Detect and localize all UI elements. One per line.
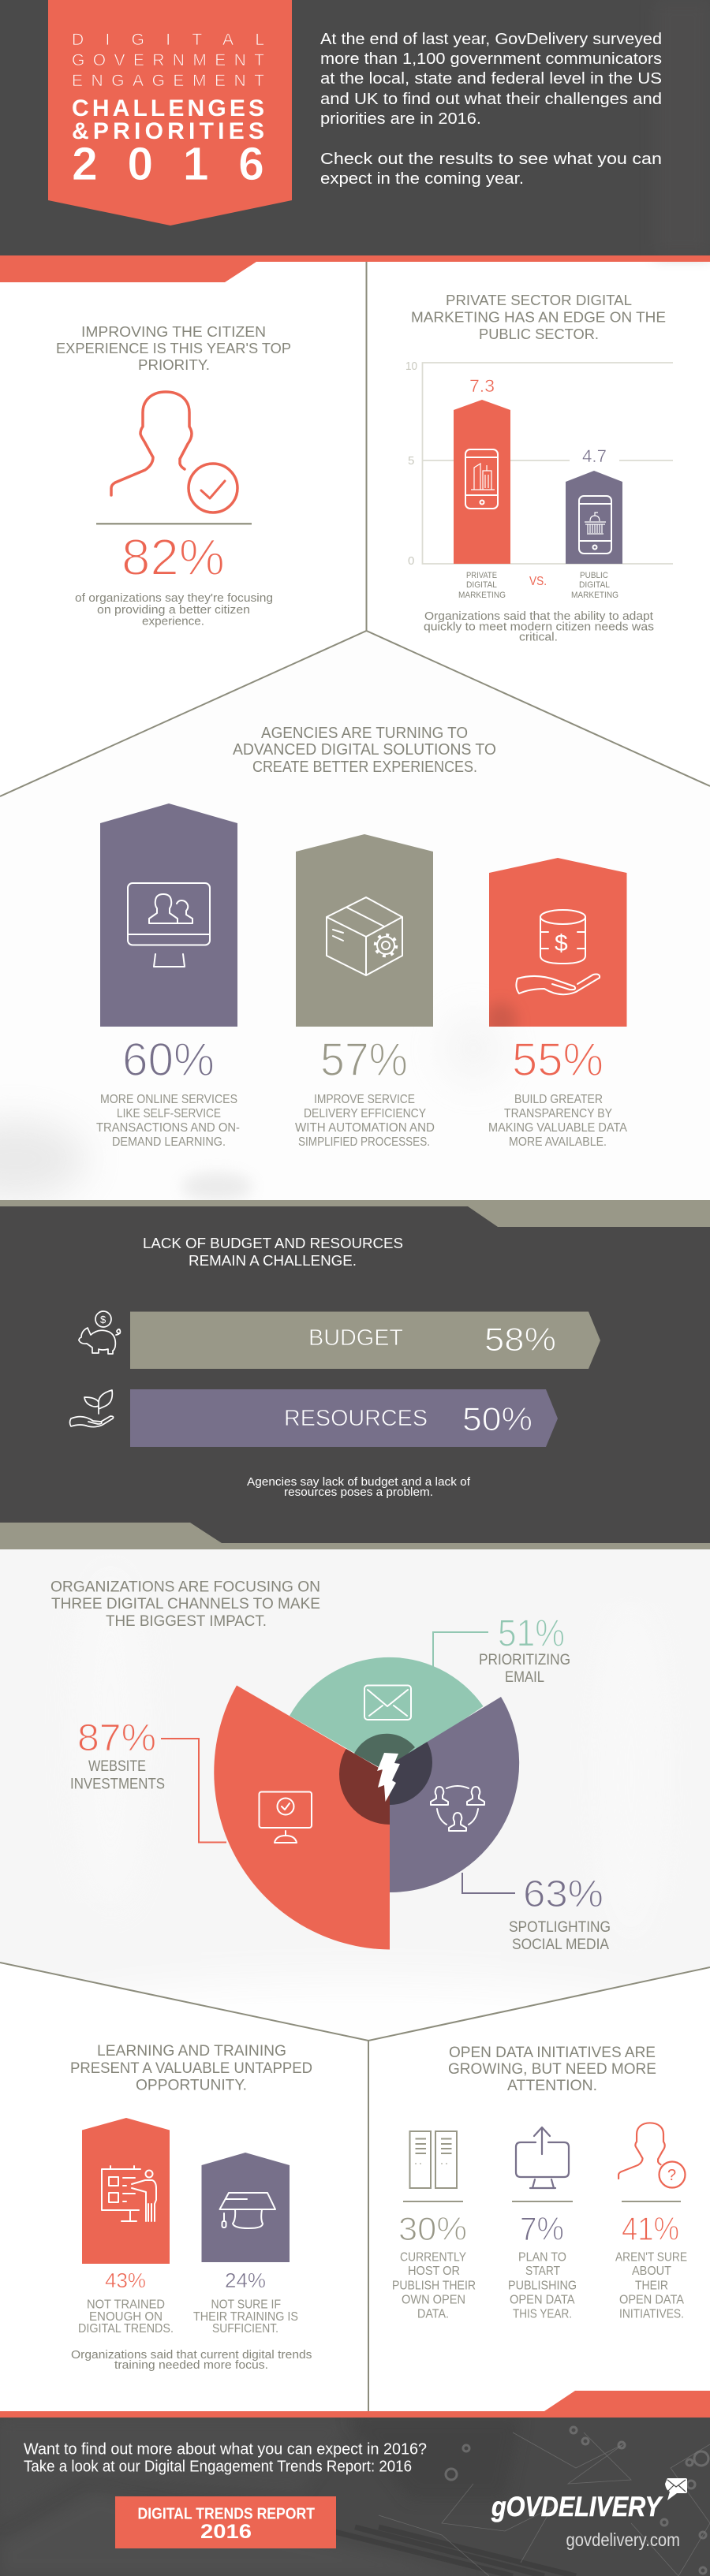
heading: PRESENT A VALUABLE UNTAPPED [70, 2060, 312, 2077]
callout: website 87%: INVESTMENTS [70, 1776, 165, 1793]
caption: on providing a better citizen [97, 603, 250, 617]
bar: private [454, 376, 510, 564]
ribbon title: &PRIORITIES [72, 118, 264, 144]
logo: govdelivery: govdelivery.com [566, 2529, 680, 2550]
intro text [320, 31, 662, 188]
caption: WITH AUTOMATION AND [295, 1121, 435, 1135]
core: website [339, 1749, 390, 1825]
column: service delivery [295, 834, 435, 1149]
caption: MAKING VALUABLE DATA [488, 1121, 627, 1135]
column: plan to publish: PLAN TO [518, 2250, 566, 2265]
caption [488, 1093, 627, 1149]
rule [403, 2201, 463, 2202]
wedge: social [390, 1697, 519, 1892]
callout: social 63%: 63% [523, 1873, 604, 1915]
column: not sure: ABOUT [632, 2265, 671, 2278]
bar: resources: 50% [462, 1400, 532, 1437]
heading [56, 324, 291, 373]
bar: not trained: 43% [105, 2268, 146, 2292]
olive top band [0, 1200, 710, 1227]
bar: private: 7.3 [469, 376, 495, 396]
panel: digital channels [50, 1579, 611, 1953]
axis labels: DIGITAL [466, 580, 497, 590]
bar: resources: RESOURCES [284, 1406, 428, 1431]
heading: OPPORTUNITY. [136, 2077, 247, 2094]
column: host data: DATA. [417, 2307, 449, 2321]
caption [424, 610, 654, 644]
axis labels: MARKETING [571, 591, 618, 600]
ribbon title: 2016 [72, 138, 264, 190]
bar: not sure: 24% [225, 2268, 266, 2292]
bar: not sure: NOT SURE IF [211, 2298, 281, 2312]
bar: not trained: NOT TRAINED [87, 2298, 165, 2312]
callout: social 63%: SPOTLIGHTING [509, 1919, 611, 1936]
caption: experience. [142, 615, 204, 628]
icon: data and hand: $ [555, 930, 568, 956]
icon: box with gear [327, 897, 402, 975]
heading: CREATE BETTER EXPERIENCES. [252, 759, 477, 776]
olive bottom band [0, 1523, 710, 1549]
button: digital trends report: DIGITAL TRENDS REPORT [137, 2506, 315, 2523]
caption: MORE ONLINE SERVICES [100, 1093, 237, 1106]
wedge: website [214, 1686, 390, 1949]
column: not sure [615, 2123, 687, 2321]
ribbon title: GOVERNMENT [72, 51, 264, 69]
column: transparency: 55% [512, 1034, 604, 1086]
intro text: Check out the results to see what you can [320, 151, 662, 168]
panel: improving the citizen experience [56, 324, 291, 628]
caption [71, 2348, 312, 2372]
shade on bar [489, 1000, 520, 1027]
heading: ATTENTION. [507, 2078, 597, 2094]
column: not sure: THEIR [635, 2279, 668, 2293]
heading: IMPROVING THE CITIZEN [81, 324, 266, 340]
panel: private vs public [405, 293, 673, 644]
icon: monitor with check [259, 1791, 312, 1843]
heading: OPEN DATA INITIATIVES ARE [449, 2045, 656, 2061]
bar: budget: 58% [484, 1321, 556, 1358]
icon: piggy bank [79, 1311, 120, 1354]
caption [295, 1093, 435, 1149]
column: plan to publish: OPEN DATA [510, 2293, 575, 2307]
panel: footer [0, 2418, 710, 2576]
icon: person with question mark [618, 2123, 685, 2187]
divider lines: top section [0, 262, 710, 796]
button: digital trends report [115, 2496, 336, 2548]
panel: mid background [0, 1549, 710, 1979]
heading: LEARNING AND TRAINING [97, 2043, 286, 2060]
heading: PRIVATE SECTOR DIGITAL [446, 293, 632, 308]
icon: piggy bank: $ [100, 1314, 106, 1325]
icon: data and hand [516, 910, 600, 994]
heading [70, 2043, 312, 2094]
column: online services [96, 803, 240, 1149]
column: not sure: 41% [622, 2210, 679, 2247]
caption: Agencies say lack of budget and a lack of [247, 1475, 471, 1489]
bar chart [405, 360, 673, 600]
bar: not trained [78, 2118, 174, 2336]
ribbon title [72, 31, 264, 190]
axis labels: PRIVATE [466, 571, 497, 580]
icon: graduation cap [219, 2193, 275, 2228]
column: online services: 60% [122, 1034, 215, 1086]
callout: social 63% [462, 1873, 611, 1953]
bar: not trained: ENOUGH ON [89, 2310, 163, 2324]
footer text: Want to find out more about what you can expect in 2016? [24, 2441, 427, 2459]
caption: DEMAND LEARNING. [112, 1135, 226, 1149]
bar chart: 10 [405, 360, 417, 373]
axis labels: PUBLIC [580, 571, 608, 580]
icon: sprout in hand [69, 1390, 114, 1427]
core: social [390, 1742, 432, 1805]
callout: email 51% [433, 1613, 570, 1686]
divider rule [96, 523, 252, 525]
footer text [24, 2441, 427, 2476]
icon: lightning bolt [377, 1753, 400, 1802]
axis labels [458, 571, 618, 600]
heading: PUBLIC SECTOR. [479, 326, 599, 342]
column: transparency [485, 858, 627, 1149]
heading: THE BIGGEST IMPACT. [106, 1613, 267, 1630]
bar: not sure: THEIR TRAINING IS [193, 2310, 298, 2324]
column: not sure: INITIATIVES. [619, 2307, 684, 2321]
ribbon title: DIGITAL [72, 31, 264, 49]
icon: connected people [431, 1786, 484, 1831]
icon: envelope speech bubble [665, 2478, 687, 2500]
intro text: and UK to find out what their challenges and [320, 91, 662, 108]
bar: not trained: DIGITAL TRENDS. [78, 2322, 174, 2336]
column: plan to publish: THIS YEAR. [513, 2307, 572, 2321]
caption: TRANSACTIONS AND ON- [96, 1121, 240, 1135]
icon: upload monitor [516, 2127, 569, 2188]
column: host data: HOST OR [408, 2265, 460, 2278]
heading: GROWING, BUT NEED MORE [448, 2061, 656, 2078]
heading: EXPERIENCE IS THIS YEAR'S TOP [56, 341, 291, 356]
logo: govdelivery: gOVDELIVERY [491, 2492, 663, 2522]
column: service delivery: 57% [320, 1034, 408, 1086]
footer text: Take a look at our Digital Engagement Trends Report: 2016 [24, 2459, 412, 2476]
bar chart: 5 [408, 454, 414, 468]
caption: MORE AVAILABLE. [509, 1135, 607, 1149]
heading: MARKETING HAS AN EDGE ON THE [411, 309, 666, 325]
column: host data: OWN OPEN [402, 2293, 465, 2307]
panel: advanced digital solutions [96, 725, 627, 1149]
panel: budget and resources [0, 1200, 710, 1549]
caption: critical. [519, 631, 558, 644]
heading: LACK OF BUDGET AND RESOURCES [143, 1235, 403, 1251]
caption: resources poses a problem. [284, 1486, 433, 1499]
column: plan to publish: PUBLISHING [508, 2279, 577, 2293]
heading: ADVANCED DIGITAL SOLUTIONS TO [233, 741, 496, 759]
heading: ORGANIZATIONS ARE FOCUSING ON [50, 1579, 320, 1596]
caption [96, 1093, 240, 1149]
heading: PRIORITY. [138, 357, 210, 373]
icon: person with question mark: ? [667, 2167, 676, 2184]
intro text: expect in the coming year. [320, 170, 524, 188]
column: plan to publish: START [525, 2265, 560, 2278]
heading: AGENCIES ARE TURNING TO [261, 725, 468, 742]
callout: website 87% [70, 1717, 226, 1842]
column: host data: PUBLISH THEIR [392, 2279, 476, 2293]
heading [50, 1579, 320, 1630]
panel: header [0, 0, 710, 255]
caption: SIMPLIFIED PROCESSES. [298, 1135, 430, 1149]
intro text: At the end of last year, GovDelivery surveyed [320, 31, 662, 48]
heading [143, 1235, 403, 1269]
intro text: priorities are in 2016. [320, 110, 481, 128]
caption: Organizations said that current digital trends [71, 2348, 312, 2362]
panel: learning and training [70, 2043, 312, 2372]
panel: house background [0, 1035, 486, 1200]
caption [247, 1475, 471, 1499]
icon: envelope [364, 1686, 411, 1720]
column: plan to publish: 7% [520, 2210, 564, 2247]
icon: presenter at board [102, 2166, 156, 2221]
heading [233, 725, 496, 776]
column: not sure: AREN'T SURE [615, 2250, 687, 2265]
caption: LIKE SELF-SERVICE [117, 1107, 221, 1120]
bar: not sure [193, 2153, 298, 2336]
bar: public: 4.7 [582, 446, 607, 466]
caption: quickly to meet modern citizen needs was [424, 620, 654, 634]
icon: servers [410, 2131, 457, 2188]
caption: DELIVERY EFFICIENCY [304, 1107, 426, 1120]
caption: BUILD GREATER [514, 1093, 603, 1106]
intro text: at the local, state and federal level in the US [320, 70, 662, 88]
bar: not sure: SUFFICIENT. [212, 2322, 278, 2336]
stat: 82%: 82% [121, 528, 225, 586]
coral band with tab [0, 255, 710, 282]
heading [448, 2045, 656, 2094]
column: host data: CURRENTLY [400, 2250, 466, 2265]
caption: Organizations said that the ability to adapt [424, 610, 654, 623]
header ribbon [48, 0, 292, 226]
icon: person with checkmark [111, 392, 237, 513]
caption: IMPROVE SERVICE [314, 1093, 415, 1106]
heading [411, 293, 666, 342]
axis labels: VS. [529, 575, 547, 588]
icon: monitor with users [128, 883, 210, 967]
callout: email 51%: PRIORITIZING [479, 1652, 570, 1668]
bar chart: 0 [408, 554, 414, 568]
caption: training needed more focus. [114, 2358, 268, 2372]
divider lines: lower section [0, 1963, 710, 2411]
panel: open data [392, 2045, 687, 2321]
ribbon title: CHALLENGES [72, 95, 264, 121]
axis labels: DIGITAL [579, 580, 610, 590]
ribbon title: ENGAGEMENT [72, 72, 264, 90]
coral footer band with tab [0, 2391, 710, 2418]
caption [75, 591, 273, 628]
rule [622, 2201, 681, 2202]
callout: website 87%: WEBSITE [88, 1758, 146, 1775]
bar: budget [130, 1312, 600, 1369]
caption: TRANSPARENCY BY [504, 1107, 612, 1120]
button: digital trends report: 2016 [200, 2521, 252, 2543]
column: host data [392, 2131, 476, 2321]
chart: overlapping channel wedges [214, 1657, 519, 1949]
heading: THREE DIGITAL CHANNELS TO MAKE [51, 1596, 320, 1612]
logo: govdelivery [491, 2478, 687, 2550]
rule [512, 2201, 573, 2202]
heading: REMAIN A CHALLENGE. [189, 1252, 357, 1269]
caption: of organizations say they're focusing [75, 591, 273, 605]
column: not sure: OPEN DATA [619, 2293, 684, 2307]
callout: social 63%: SOCIAL MEDIA [512, 1937, 609, 1953]
intro text: more than 1,100 government communicators [320, 50, 662, 68]
bar: public [566, 446, 622, 564]
core: email [354, 1734, 415, 1772]
wedge: email [290, 1657, 483, 1772]
axis labels: MARKETING [458, 591, 506, 600]
callout: website 87%: 87% [77, 1717, 156, 1759]
callout: email 51%: EMAIL [505, 1669, 544, 1686]
column: plan to publish [508, 2127, 577, 2321]
bar: budget: BUDGET [308, 1325, 403, 1351]
column: host data: 30% [398, 2210, 467, 2247]
callout: email 51%: 51% [498, 1613, 565, 1654]
bar: resources [130, 1389, 558, 1447]
